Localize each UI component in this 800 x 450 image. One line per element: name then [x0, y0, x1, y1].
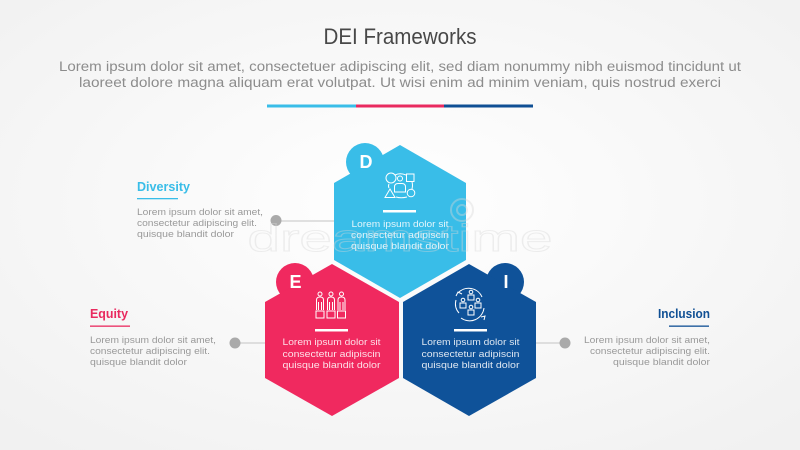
watermark: dreamstime	[248, 218, 552, 260]
body text: Lorem ipsum dolor sit	[282, 336, 381, 347]
divider	[383, 210, 416, 212]
body text: quisque blandit dolor	[422, 359, 520, 370]
connector: inclusion	[535, 338, 570, 348]
label block: inclusion: quisque blandit dolor	[613, 356, 710, 367]
body text	[351, 218, 449, 251]
label block: diversity	[137, 179, 263, 239]
letter E: E	[289, 272, 302, 292]
connector: diversity	[270, 215, 335, 226]
letter D: D	[360, 152, 372, 172]
body text: consectetur adipiscin	[282, 348, 380, 359]
tricolor divider	[267, 104, 533, 108]
icon: diverse people and shapes	[385, 173, 415, 198]
body text: Lorem ipsum dolor sit	[352, 218, 449, 229]
label block: equity: quisque blandit dolor	[90, 356, 187, 367]
label block: diversity: Lorem ipsum dolor sit amet,	[137, 206, 263, 217]
body text: consectetur adipiscin	[351, 229, 449, 240]
body text	[282, 336, 381, 370]
label block: inclusion	[584, 306, 710, 367]
label block: inclusion: Inclusion	[658, 306, 710, 321]
panel: inclusion hexagon	[403, 263, 536, 416]
watermark	[248, 199, 552, 260]
panel: equity hexagon	[265, 263, 399, 416]
body text: quisque blandit dolor	[351, 240, 449, 251]
divider	[454, 329, 487, 332]
icon: people in a circular cycle	[455, 288, 485, 321]
label block: equity: consectetur adipiscing elit.	[90, 345, 210, 356]
label block: equity	[90, 306, 216, 367]
label block: diversity: quisque blandit dolor	[137, 228, 234, 239]
connector: equity	[230, 338, 266, 348]
letter I: I	[503, 272, 509, 292]
panel: diversity hexagon	[334, 143, 466, 298]
body text: Lorem ipsum dolor sit	[422, 336, 520, 347]
body text: quisque blandit dolor	[282, 359, 380, 370]
label block: diversity: Diversity	[137, 179, 191, 194]
subtitle text: Lorem ipsum dolor sit amet, consectetuer adipiscing elit, sed diam nonummy nibh euismod tincidunt ut	[59, 59, 741, 75]
label block: diversity: consectetur adipiscing elit.	[137, 217, 257, 228]
body text	[422, 336, 520, 370]
subtitle text: laoreet dolore magna aliquam erat volutpat. Ut wisi enim ad minim veniam, quis nostrud exerci	[79, 75, 721, 91]
icon: three people standing on equal blocks	[316, 292, 346, 318]
label block: equity: Lorem ipsum dolor sit amet,	[90, 334, 216, 345]
title: DEI Frameworks	[324, 24, 476, 49]
body text: consectetur adipiscin	[422, 348, 520, 359]
label block: inclusion: consectetur adipiscing elit.	[590, 345, 710, 356]
label block: equity: Equity	[90, 306, 129, 321]
label block: inclusion: Lorem ipsum dolor sit amet,	[584, 334, 710, 345]
divider	[315, 329, 348, 332]
subtitle text	[59, 59, 741, 91]
